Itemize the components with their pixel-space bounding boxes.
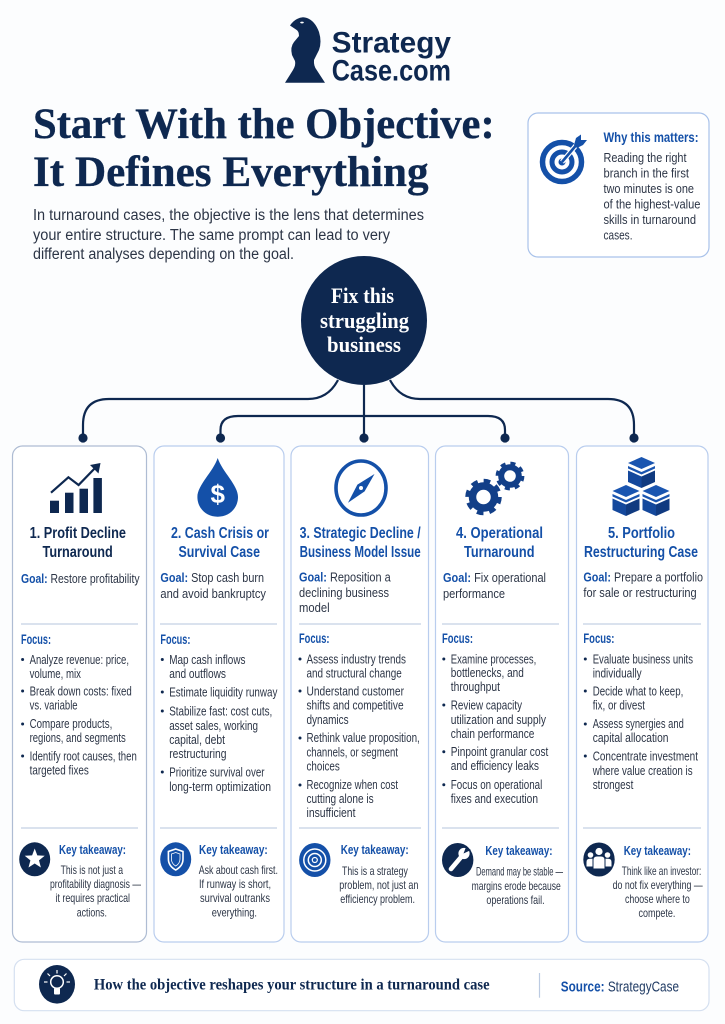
icon: water drop with dollar: $ [210,479,225,509]
icon: bullseye badge [299,843,330,877]
key takeaway: compete. [638,906,675,920]
focus list [442,631,549,806]
heading: 3. Strategic Decline / [300,525,421,542]
key takeaway: survival outranks [200,891,270,905]
icon: target with arrow [542,134,587,182]
focus list: Stabilize fast: cost cuts, [169,704,272,718]
footer heading: How the objective reshapes your structure in a turnaround case [94,976,490,993]
callout heading: Why this matters: [604,130,698,145]
key takeaway [50,842,141,920]
focus list: bottlenecks, and [451,666,524,680]
key takeaway: Key takeaway: [485,843,552,858]
focus list: Analyze revenue: price, [30,653,129,667]
heading: Survival Case [178,544,260,561]
key takeaway: Key takeaway: [199,842,268,857]
focus list: Examine processes, [451,652,536,666]
focus list: capital, debt [169,733,225,747]
logo: Strategy [332,27,452,60]
goal: for sale or restructuring [583,586,697,600]
callout text: two minutes is one [604,181,694,196]
key takeaway: everything. [212,906,257,920]
key takeaway: operations fail. [486,893,545,907]
key takeaway: Ask about cash first. [199,863,278,877]
icon: wrench badge [442,843,473,877]
icon: light bulb [39,965,75,1004]
key takeaway: problem, not just an [339,878,418,892]
heading: Turnaround [42,544,113,561]
focus list [21,632,137,778]
heading: 5. Portfolio [608,525,675,542]
goal: Goal: Stop cash burn [160,571,264,585]
focus list: insufficient [306,806,356,820]
intro text [33,207,424,263]
focus list: targeted fixes [30,764,89,778]
focus list: utilization and supply [451,713,547,727]
key takeaway: This is a strategy [342,864,408,878]
focus list: Understand customer [306,684,404,698]
logo [285,17,452,88]
key takeaway [613,843,703,920]
goal [160,571,267,601]
focus list: strongest [593,778,634,792]
heading [300,525,421,561]
goal: Goal: Fix operational [443,571,546,585]
goal [443,571,546,601]
icon: gears [468,463,523,513]
focus list: Assess industry trends [306,652,406,666]
central circle: fix this struggling business: Fix this [331,283,394,308]
logo: Case.com [332,54,451,88]
focus list: Focus on operational [451,778,542,792]
focus list: Rethink value proposition, [306,731,420,745]
focus list: cutting alone is [306,792,374,806]
callout text [604,150,700,242]
focus list: capital allocation [593,731,668,745]
source: Source: StrategyCase [561,979,679,996]
focus list [583,631,698,792]
focus list: Focus: [160,632,190,647]
focus list: fixes and execution [451,792,538,806]
focus list: fix, or divest [593,698,645,712]
focus list: Concentrate investment [593,750,698,764]
icon: stacked cubes [612,457,670,516]
title: Start With the Objective: [33,101,495,148]
focus list: Prioritize survival over [169,766,264,780]
intro text: different analyses depending on the goal. [33,246,294,263]
focus list: Focus: [21,632,51,647]
key takeaway: efficiency problem. [340,892,415,906]
focus list: individually [593,666,642,680]
heading [171,525,269,561]
heading [456,525,543,561]
callout text: cases. [604,228,632,242]
title [33,101,495,196]
goal [299,571,391,615]
goal: declining business [299,586,389,600]
key takeaway: Key takeaway: [59,842,126,857]
focus list: and structural change [306,666,402,680]
heading: 1. Profit Decline [30,525,126,542]
connector lines [78,380,639,443]
icon: water drop with dollar [197,458,238,517]
focus list: Focus: [299,631,330,646]
icon: shield badge [160,842,191,876]
focus list: dynamics [306,713,349,727]
focus list: and efficiency leaks [451,759,539,773]
focus list [298,631,420,820]
key takeaway: profitability diagnosis — [50,877,141,891]
icon: star badge [19,842,50,876]
heading: Business Model Issue [300,544,421,561]
focus list: Evaluate business units [593,652,693,666]
panel: card 2 cash crisis [154,446,284,942]
heading: Restructuring Case [584,544,698,561]
key takeaway: it requires practical [56,891,130,905]
key takeaway: Demand may be stable — [476,864,563,878]
goal: performance [443,587,505,601]
focus list: where value creation is [592,764,693,778]
focus list: Compare products, [30,717,112,731]
panel: card 1 profit decline [12,446,146,942]
key takeaway [199,842,278,920]
focus list: regions, and segments [30,731,126,745]
focus list [160,632,278,794]
focus list: Pinpoint granular cost [451,745,549,759]
callout text: of the highest-value [604,196,700,212]
title: It Defines Everything [33,149,429,196]
key takeaway: Key takeaway: [624,843,691,858]
key takeaway: This is not just a [61,863,123,877]
focus list: and outflows [169,667,226,681]
focus list: vs. variable [30,698,78,712]
key takeaway: margins erode because [472,879,561,893]
icon: compass [336,461,386,515]
key takeaway [339,842,418,906]
key takeaway: Key takeaway: [341,842,409,857]
focus list: Focus: [583,631,614,646]
focus list: volume, mix [30,667,82,681]
key takeaway [472,843,563,907]
intro text: In turnaround cases, the objective is the lens that determines [33,207,424,224]
goal: and avoid bankruptcy [160,587,267,601]
focus list: Focus: [442,631,473,646]
focus list: channels, or segment [306,746,398,760]
heading [30,525,126,561]
heading: 2. Cash Crisis or [171,525,269,542]
icon: growth chart [50,463,102,513]
callout text: Reading the right [604,150,687,165]
focus list: Identify root causes, then [30,750,137,764]
focus list: throughput [451,680,500,694]
focus list: Assess synergies and [593,717,684,731]
focus list: Review capacity [451,698,523,712]
central circle: fix this struggling business: business [327,332,401,357]
panel: card 5 portfolio restructuring [576,446,708,942]
panel: card 4 operational turnaround [436,446,568,942]
focus list: long-term optimization [169,780,271,794]
focus list: asset sales, working [169,719,258,733]
callout text: skills in turnaround [604,212,696,227]
heading: 4. Operational [456,525,543,542]
goal: Goal: Prepare a portfolio [583,571,703,585]
intro text: your entire structure. The same prompt can lead to very [33,227,390,244]
focus list: Decide what to keep, [593,684,683,698]
goal: Goal: Reposition a [299,571,391,585]
key takeaway: If runway is short, [199,877,271,891]
goal: Goal: Restore profitability [21,572,140,586]
heading [584,525,698,561]
focus list: chain performance [451,727,534,741]
callout text: branch in the first [604,166,689,180]
central circle: fix this struggling business [301,256,427,385]
central circle: fix this struggling business: struggling [320,308,409,333]
icon: chess knight [285,17,325,83]
focus list: Recognize when cost [306,778,398,792]
focus list: Estimate liquidity runway [169,686,278,700]
key takeaway: choose where to [625,892,690,906]
focus list: Map cash inflows [169,653,246,667]
icon: people badge [583,842,615,876]
focus list: Break down costs: fixed [30,684,132,698]
goal: model [299,601,330,615]
panel: why this matters [528,113,709,257]
focus list: restructuring [169,747,226,761]
footer bar [14,959,709,1011]
panel: card 3 strategic decline [291,446,428,942]
heading: Turnaround [464,544,534,561]
focus list: shifts and competitive [306,698,404,712]
goal [583,571,703,600]
focus list: choices [306,760,340,774]
key takeaway: actions. [77,906,107,920]
